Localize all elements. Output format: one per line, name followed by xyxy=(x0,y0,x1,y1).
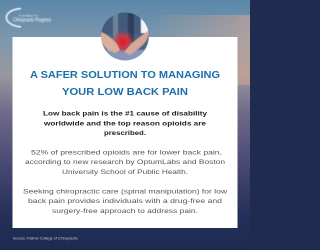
icon: right hand xyxy=(124,30,149,55)
text block: chiropractic care: back pain provides individuals with a drug-free and xyxy=(28,198,222,205)
text block: chiropractic care: surgery-free approach to address pain. xyxy=(52,208,198,215)
text block: key statement: worldwide and the top reason opioids are xyxy=(43,120,206,128)
title xyxy=(30,69,220,98)
infographic canvas xyxy=(0,0,250,240)
text block: chiropractic care: Seeking chiropractic care (spinal manipulation) for low xyxy=(23,188,227,196)
panel: white card xyxy=(12,37,238,228)
text block: research statistic: according to new research by OptumLabs and Boston xyxy=(25,159,225,166)
text block: key statement: prescribed. xyxy=(104,130,146,137)
source note: Source: Palmer College of Chiropractic xyxy=(13,236,78,240)
title: A SAFER SOLUTION TO MANAGING xyxy=(30,69,220,81)
background gradient xyxy=(0,0,250,250)
text block: key statement: Low back pain is the #1 cause of disability xyxy=(43,110,207,118)
text block: key statement xyxy=(43,110,207,137)
logo: Foundation for Chiropractic Progress: Chiropractic Progress xyxy=(13,18,51,24)
text block: research statistic: 52% of prescribed opioids are for lower back pain, xyxy=(31,150,222,156)
text block: research statistic: University School of Public Health. xyxy=(62,169,188,176)
text block: chiropractic care xyxy=(23,188,227,215)
photo: hands on lower back with red pain spot xyxy=(100,12,150,62)
logo: Foundation for Chiropractic Progress xyxy=(6,8,51,27)
logo: Foundation for Chiropractic Progress: Foundation for xyxy=(19,14,38,18)
title: YOUR LOW BACK PAIN xyxy=(62,86,188,98)
icon: left hand xyxy=(101,32,120,53)
text block: research statistic xyxy=(25,150,225,176)
